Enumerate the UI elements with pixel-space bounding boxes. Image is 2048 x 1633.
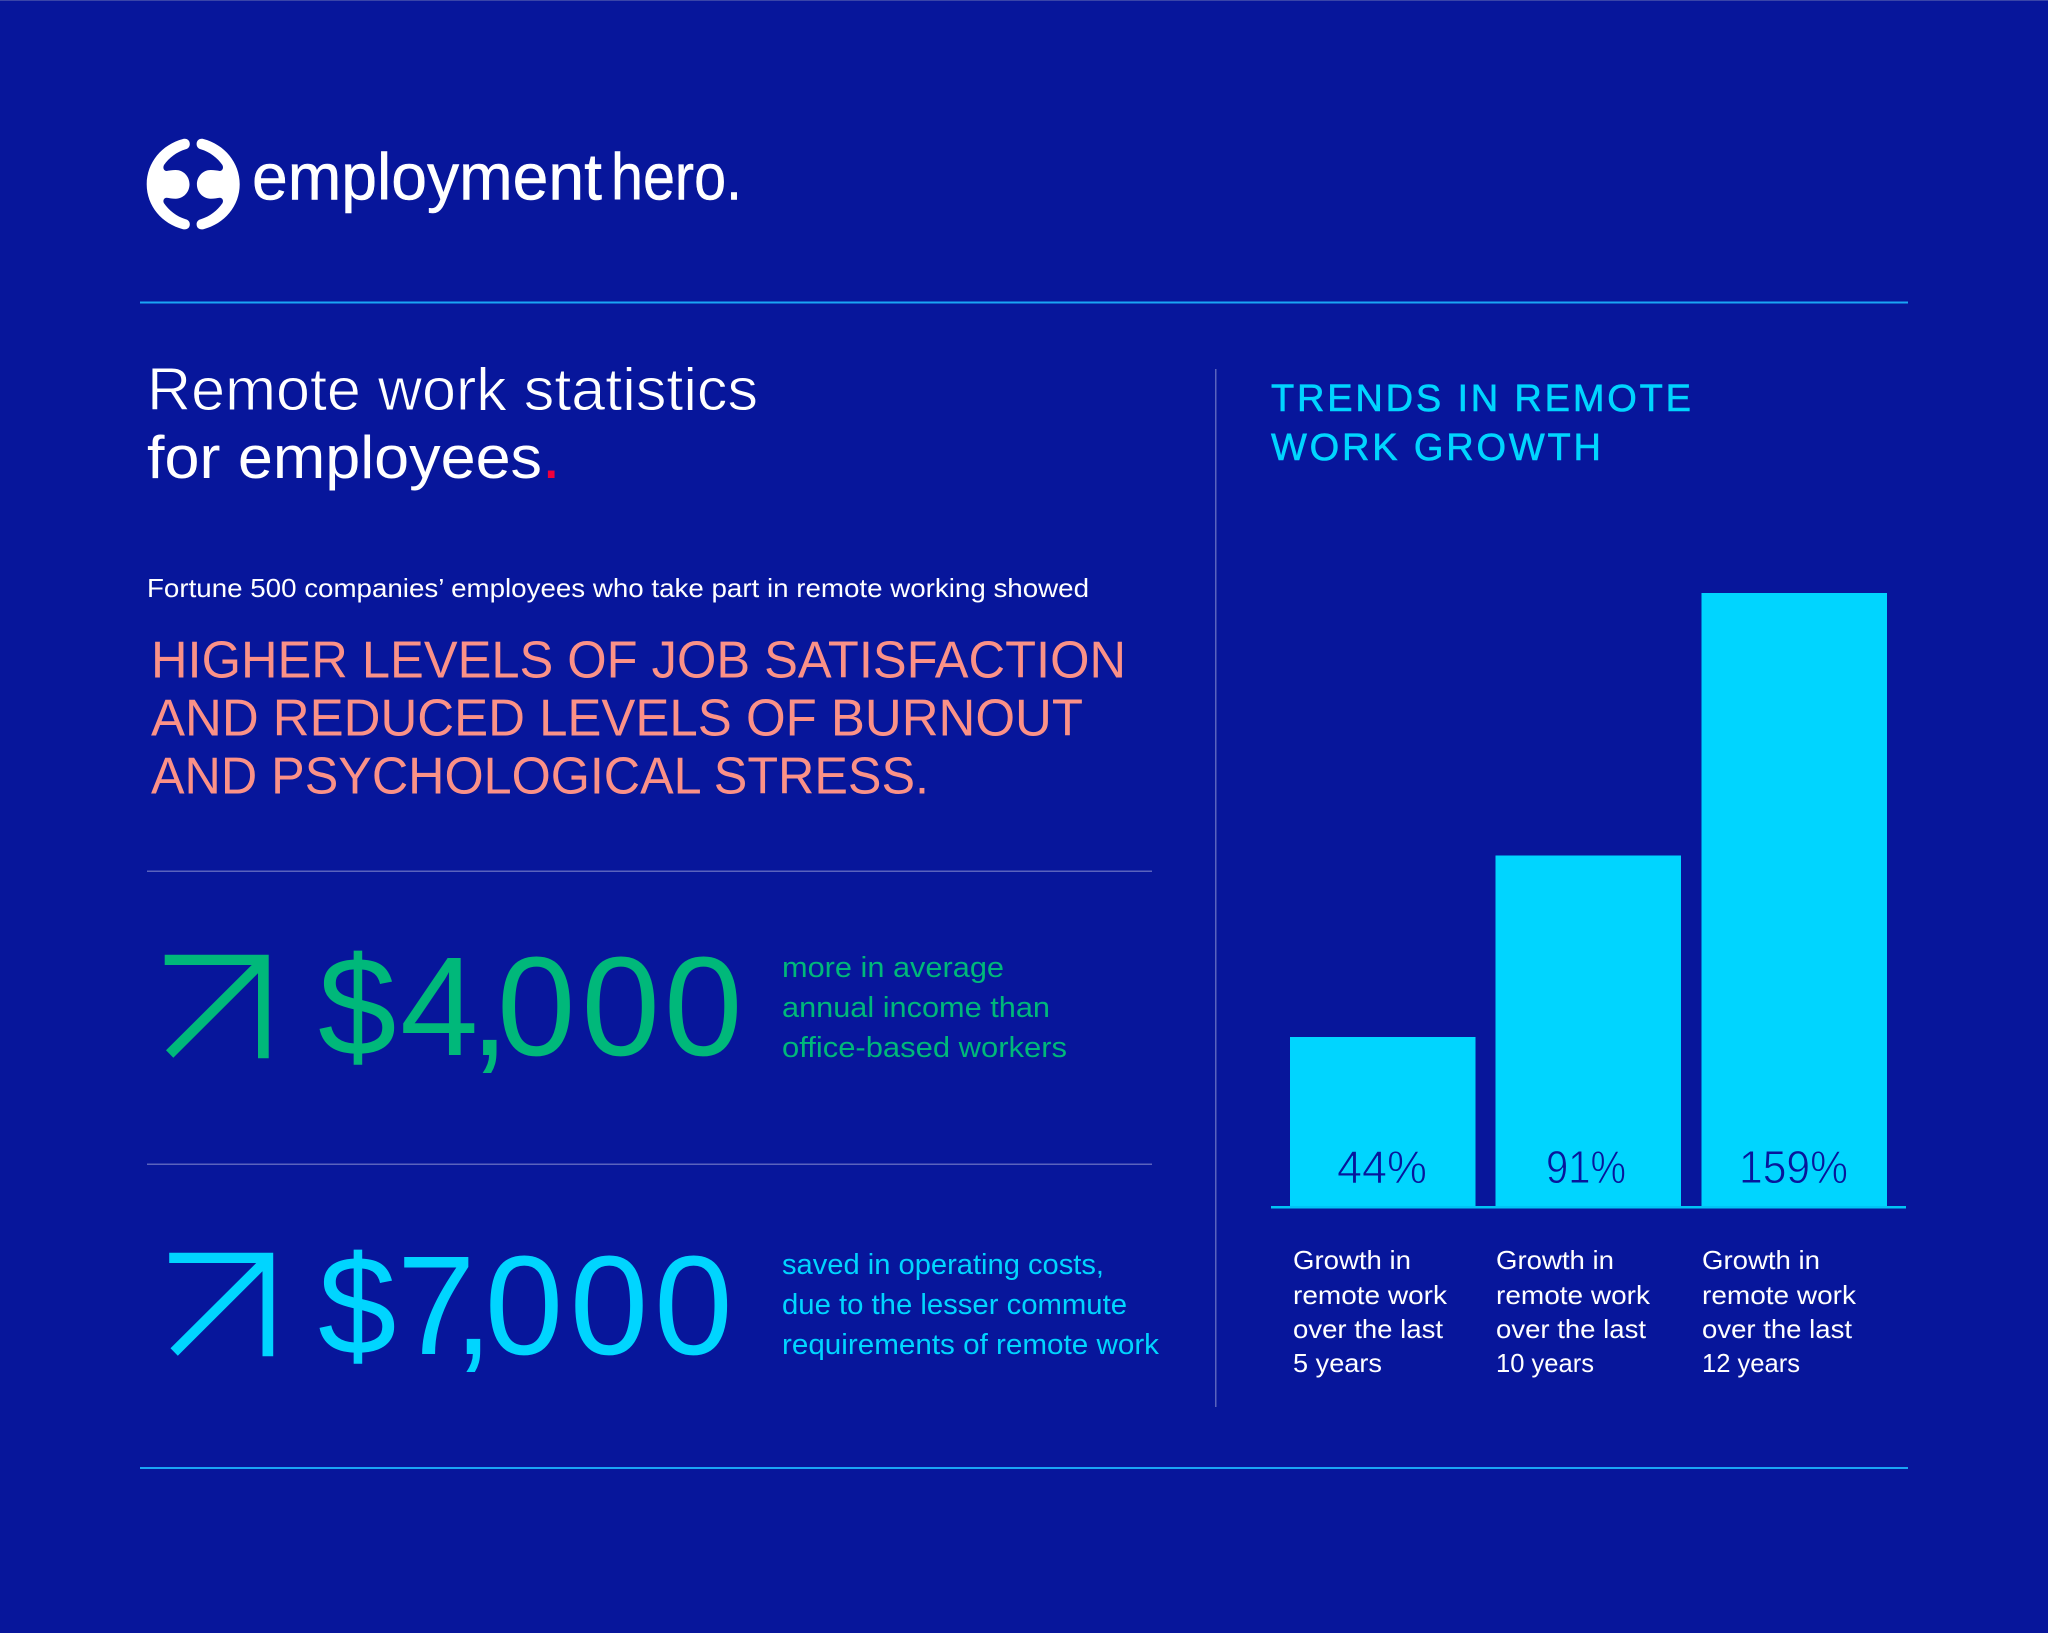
caption: 10 years: remote work bbox=[1496, 1280, 1651, 1310]
bar: 44% bbox=[1290, 1037, 1476, 1207]
figure: $4,000: $4,000 bbox=[318, 927, 742, 1085]
icon: green up arrow bbox=[165, 955, 269, 1058]
bar chart: remote work growth bbox=[1271, 593, 1906, 1208]
caption: 10 years: 10 years bbox=[1496, 1348, 1594, 1378]
bar: 159% bbox=[1702, 593, 1887, 1207]
caption: 10 years bbox=[1496, 1245, 1651, 1378]
headline callout: HIGHER LEVELS OF JOB SATISFACTION bbox=[151, 631, 1126, 689]
caption: 12 years: remote work bbox=[1702, 1280, 1857, 1310]
stat: $7,000 saved bbox=[169, 1226, 1160, 1384]
caption: 12 years: over the last bbox=[1702, 1314, 1853, 1344]
heading: remote work statistics: Remote work statistics bbox=[147, 356, 758, 423]
bar: 44%: 44% bbox=[1337, 1141, 1427, 1193]
chart baseline bbox=[1271, 1206, 1906, 1208]
logo wordmark: employment bbox=[252, 140, 602, 214]
description: income: annual income than bbox=[782, 992, 1050, 1024]
caption: 5 years: Growth in bbox=[1293, 1245, 1411, 1275]
logo: employment hero bbox=[147, 139, 742, 229]
icon: employment hero mark bbox=[147, 139, 240, 229]
caption: 5 years: remote work bbox=[1293, 1280, 1448, 1310]
icon: cyan up arrow bbox=[169, 1253, 273, 1356]
description: income: more in average bbox=[782, 952, 1004, 984]
description: savings bbox=[782, 1249, 1160, 1361]
heading: remote work statistics: . bbox=[542, 415, 561, 493]
bar: 91%: 91% bbox=[1546, 1141, 1626, 1193]
description: savings: saved in operating costs, bbox=[782, 1249, 1104, 1281]
caption: 12 years: Growth in bbox=[1702, 1245, 1820, 1275]
heading: remote work statistics bbox=[147, 356, 758, 493]
headline callout bbox=[151, 631, 1126, 805]
caption: 5 years: 5 years bbox=[1293, 1348, 1382, 1378]
caption: 12 years: 12 years bbox=[1702, 1348, 1800, 1378]
description: income bbox=[782, 952, 1067, 1064]
description: savings: due to the lesser commute bbox=[782, 1289, 1127, 1321]
headline callout: AND REDUCED LEVELS OF BURNOUT bbox=[151, 689, 1083, 747]
intro text: Fortune 500 companies’ employees who take part in remote working showed bbox=[147, 573, 1089, 603]
caption: 10 years: over the last bbox=[1496, 1314, 1647, 1344]
bar: 91% bbox=[1496, 856, 1681, 1207]
logo wordmark: hero. bbox=[611, 140, 742, 214]
bar: 159%: 159% bbox=[1739, 1141, 1848, 1193]
top rule bbox=[140, 302, 1908, 304]
chart heading: trends in remote work growth: TRENDS IN REMOTE bbox=[1271, 378, 1691, 420]
chart heading: trends in remote work growth: WORK GROWTH bbox=[1271, 427, 1601, 469]
headline callout: AND PSYCHOLOGICAL STRESS. bbox=[151, 747, 929, 805]
description: income: office-based workers bbox=[782, 1032, 1067, 1064]
heading: remote work statistics: for employees bbox=[147, 424, 542, 491]
bottom rule bbox=[140, 1467, 1908, 1469]
caption: 12 years bbox=[1702, 1245, 1857, 1378]
description: savings: requirements of remote work bbox=[782, 1329, 1160, 1361]
stat: $4,000 income bbox=[165, 927, 1067, 1085]
figure: $7,000: $7,000 bbox=[318, 1226, 733, 1384]
caption: 10 years: Growth in bbox=[1496, 1245, 1614, 1275]
caption: 5 years: over the last bbox=[1293, 1314, 1444, 1344]
chart heading: trends in remote work growth bbox=[1271, 378, 1691, 469]
caption: 5 years bbox=[1293, 1245, 1448, 1378]
